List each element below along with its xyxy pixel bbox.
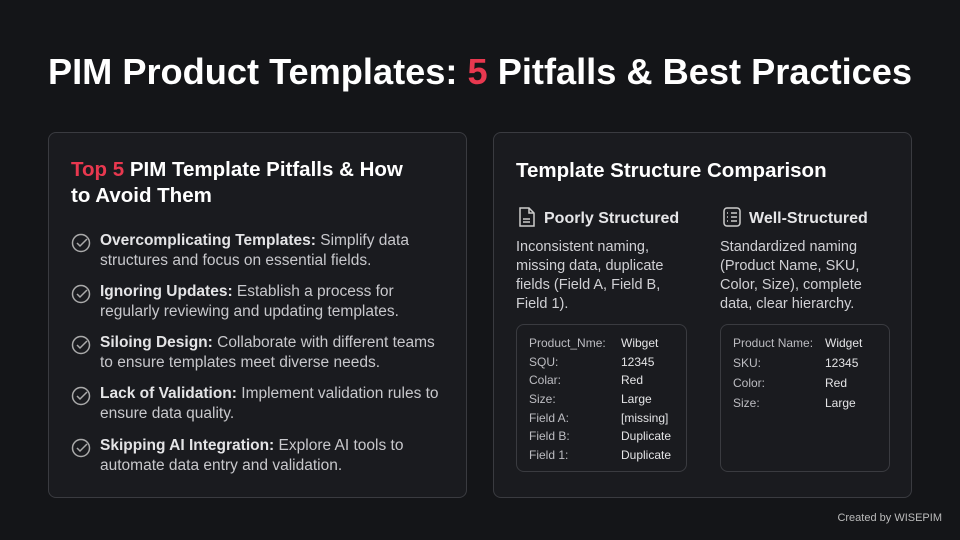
poorly structured table: Product_Nme:: [529, 336, 606, 350]
well-structured header: [723, 207, 868, 227]
well-structured header: Well-Structured: [749, 210, 868, 227]
poorly structured table: Red: [621, 373, 643, 387]
poorly structured table: SQU:: [529, 355, 558, 369]
well-structured description: Standardized naming (Product Name, SKU, Color, Size), complete data, clear hierarchy.: [720, 239, 862, 312]
credit: Created by WISEPIM: [837, 512, 942, 524]
poorly structured table: Duplicate: [621, 429, 671, 443]
well-structured table: Size:: [733, 396, 760, 410]
well-structured table: Color:: [733, 376, 765, 390]
item 1: Overcomplicating Templates: Simplify data structures and focus on essential fields.: [100, 232, 409, 269]
poorly structured table: Large: [621, 392, 652, 406]
item 4: Lack of Validation: Implement validation rules to ensure data quality.: [100, 385, 439, 422]
poorly structured table: 12345: [621, 355, 654, 369]
poorly structured table: Size:: [529, 392, 556, 406]
well-structured table: Product Name:: [733, 336, 813, 350]
heading: pitfalls: Top 5 PIM Template Pitfalls & How to Avoid Them: [71, 158, 403, 207]
title: PIM Product Templates: 5 Pitfalls & Best Practices: [48, 51, 912, 92]
poorly structured table: Duplicate: [621, 448, 671, 462]
poorly structured header: Poorly Structured: [544, 210, 679, 227]
well-structured table: [720, 324, 890, 472]
item 3: Siloing Design: Collaborate with different teams to ensure templates meet diverse needs.: [100, 334, 435, 371]
poorly structured table: [516, 324, 687, 472]
well-structured table: Large: [825, 396, 856, 410]
poorly structured table: [missing]: [621, 411, 668, 425]
well-structured table: Red: [825, 376, 847, 390]
well-structured table: SKU:: [733, 356, 761, 370]
poorly structured table: Field B:: [529, 429, 570, 443]
poorly structured description: Inconsistent naming, missing data, duplicate fields (Field A, Field B, Field 1).: [516, 239, 664, 312]
item 5: Skipping AI Integration: Explore AI tools to automate data entry and validation.: [100, 437, 403, 474]
poorly structured table: Field 1:: [529, 448, 568, 462]
poorly structured table: Field A:: [529, 411, 569, 425]
panel: pitfalls: [48, 132, 467, 498]
heading: comparison: Template Structure Comparison: [516, 159, 827, 182]
well-structured table: 12345: [825, 356, 858, 370]
item 2: Ignoring Updates: Establish a process for regularly reviewing and updating templates.: [100, 283, 399, 320]
poorly structured table: Wibget: [621, 336, 658, 350]
panel: comparison: [493, 132, 912, 498]
poorly structured table: Colar:: [529, 373, 561, 387]
well-structured table: Widget: [825, 336, 862, 350]
